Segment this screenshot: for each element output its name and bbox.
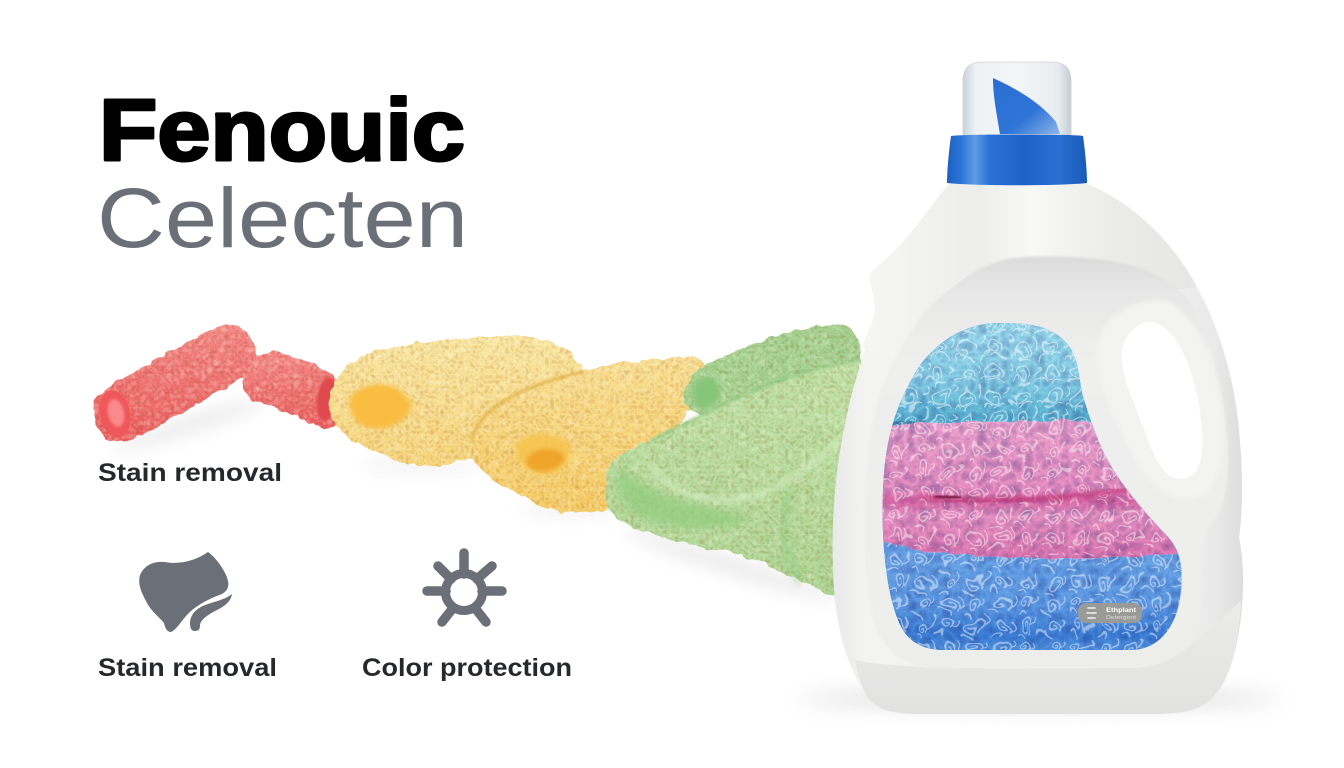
- blue collar: [947, 134, 1087, 185]
- bottle shoulder highlight: [862, 183, 1197, 360]
- green towel front folded: [605, 360, 860, 596]
- recessed panel: [864, 257, 1228, 668]
- caption: stain removal bottom: Stain removal: [98, 654, 277, 682]
- red roll 1: [93, 325, 257, 441]
- floor shadows: [111, 392, 838, 609]
- yellow roll 2: [470, 357, 705, 513]
- blue towel: [882, 530, 1182, 650]
- bottle base: [855, 600, 1241, 714]
- bottle: [800, 62, 1280, 714]
- pink towel: [870, 420, 1180, 558]
- green towel back roll: [685, 325, 862, 415]
- measuring cap: [963, 62, 1071, 136]
- icon: stain drop: [139, 552, 232, 632]
- row of rolled towels: [93, 325, 862, 609]
- caption: color protection: Color protection: [362, 654, 572, 682]
- bottle body: [833, 183, 1243, 714]
- label badge: [1078, 603, 1142, 623]
- cyan towel: [890, 323, 1097, 436]
- label badge: Ethplant: [1106, 608, 1136, 614]
- icon: sun gear: [427, 553, 502, 622]
- laundry window: [882, 323, 1182, 650]
- label badge: Detergent: [1106, 615, 1137, 621]
- yellow roll 1: [329, 337, 582, 466]
- handle hole: [1122, 322, 1202, 479]
- subtitle: Celecten: [97, 171, 468, 265]
- blue spout: [993, 78, 1060, 134]
- title: [97, 82, 468, 265]
- caption: stain removal top: Stain removal: [98, 459, 282, 487]
- ground shadow: [800, 692, 1280, 706]
- red roll 2: [243, 352, 341, 428]
- handle recess: [1097, 300, 1223, 499]
- title: Fenouic: [99, 82, 465, 179]
